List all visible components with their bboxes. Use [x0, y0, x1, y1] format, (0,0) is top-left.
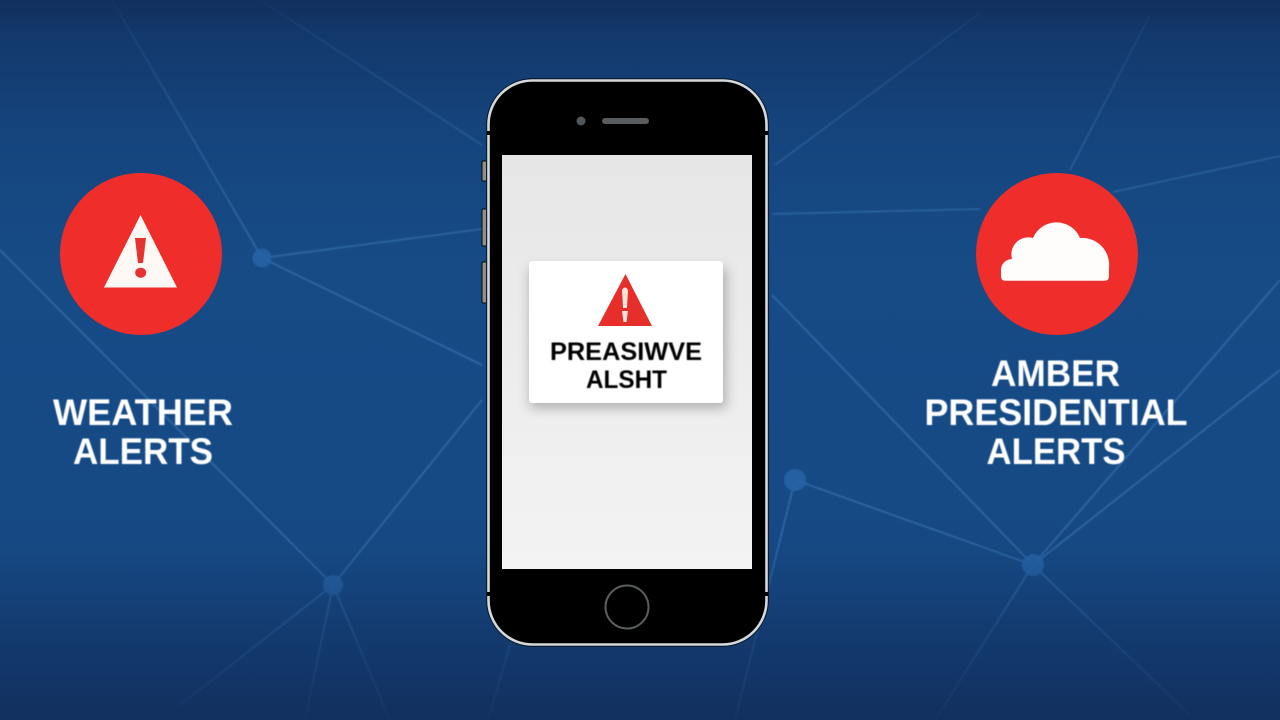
heading: amber presidential alerts	[924, 353, 1188, 472]
heading: weather alerts	[53, 392, 233, 472]
heading: amber presidential alerts: AMBER	[991, 353, 1120, 394]
icon: weather warning badge	[60, 173, 222, 335]
icon: card warning triangle	[598, 274, 652, 326]
alert card shadow	[530, 268, 726, 408]
speaker	[602, 118, 649, 124]
icon: cloud badge	[976, 173, 1138, 335]
heading: amber presidential alerts: PRESIDENTIAL	[924, 392, 1188, 433]
card text	[550, 338, 702, 394]
card text: PREASIWVE	[550, 338, 702, 366]
phone body	[487, 79, 768, 646]
antenna breaks	[487, 131, 768, 596]
heading: weather alerts: ALERTS	[73, 431, 213, 472]
home button	[606, 586, 648, 628]
heading: weather alerts: WEATHER	[53, 392, 233, 433]
heading: amber presidential alerts: ALERTS	[986, 431, 1126, 472]
card text: ALSHT	[586, 366, 667, 394]
alert card	[529, 261, 723, 403]
camera	[576, 116, 586, 126]
side buttons	[482, 161, 487, 303]
phone	[482, 79, 768, 646]
screen	[502, 155, 752, 569]
